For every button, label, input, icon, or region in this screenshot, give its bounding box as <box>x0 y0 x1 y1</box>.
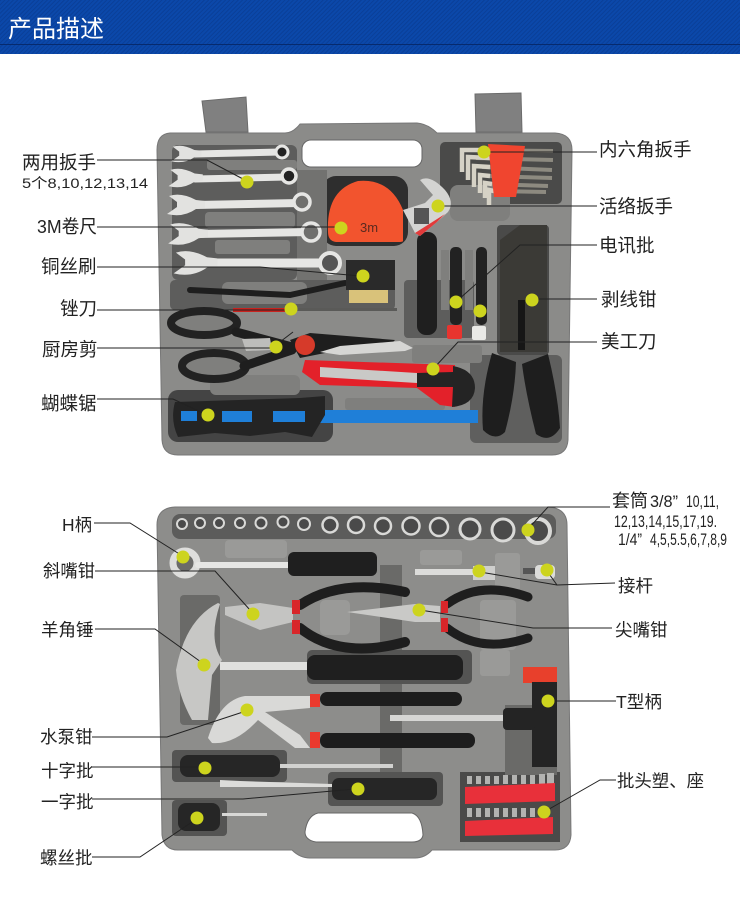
claw hammer <box>176 603 463 720</box>
water pump pliers <box>208 692 475 748</box>
leader: 内六角扳手 <box>485 151 597 153</box>
labels: lower case, left: 一字批 <box>41 792 94 812</box>
labels: upper case, left <box>22 152 148 414</box>
extension bars <box>415 565 555 580</box>
ratchet handle <box>173 551 377 576</box>
wire stripper pliers <box>482 225 560 438</box>
adjustable wrench <box>403 178 451 335</box>
leader: 锉刀 <box>97 309 288 311</box>
T-handle driver <box>390 667 557 767</box>
title: 产品描述 <box>8 16 104 43</box>
slotted screwdriver <box>220 778 437 800</box>
labels: upper case, right: 电讯批 <box>599 235 655 256</box>
case body <box>157 123 572 455</box>
leader: 斜嘴钳 <box>95 571 250 610</box>
labels: upper case, right: 活络扳手 <box>599 196 673 217</box>
long nose pliers <box>347 590 528 644</box>
leader: 一字批 <box>92 789 355 799</box>
tape measure <box>328 181 403 242</box>
panel: upper tool case <box>97 93 597 455</box>
socket sizes text block <box>612 491 727 549</box>
labels: upper case, left: 蝴蝶锯 <box>41 393 97 414</box>
tape measure: 3m <box>360 220 378 235</box>
callout dots and leaders, upper case <box>97 146 597 422</box>
leader: T型柄 <box>548 700 616 702</box>
leader: 厨房剪 <box>97 332 293 348</box>
labels: upper case, right: 美工刀 <box>601 331 657 352</box>
wire brush <box>190 260 395 303</box>
socket sizes text block: 10,11, <box>686 492 719 511</box>
leader: 羊角锤 <box>95 629 201 662</box>
leader: 螺丝批 <box>92 820 195 857</box>
leader: 3M卷尺 <box>97 226 335 228</box>
leader: 两用扳手 <box>97 160 243 179</box>
case latch tabs <box>202 93 522 132</box>
leader: 电讯批 <box>458 245 597 300</box>
kitchen scissors <box>171 311 413 379</box>
labels: upper case, left: 厨房剪 <box>42 339 98 360</box>
leader: 剥线钳 <box>532 298 597 300</box>
leader: 水泵钳 <box>92 712 243 737</box>
bit holder set <box>465 773 555 836</box>
labels: lower case, right: 批头塑、座 <box>617 771 704 791</box>
hex key set <box>462 144 553 205</box>
labels: lower case, left <box>40 515 95 868</box>
tray recesses <box>168 142 562 443</box>
handle cut-out <box>305 813 423 842</box>
case body <box>157 507 571 858</box>
leader: 十字批 <box>92 766 203 768</box>
callout dots and leaders, lower case <box>92 507 616 857</box>
leader: 接杆 <box>480 571 615 585</box>
yellow marker dots <box>202 146 538 422</box>
labels: lower case, left: 十字批 <box>41 761 94 781</box>
hacksaw <box>173 396 478 437</box>
file <box>233 308 397 312</box>
labels: upper case, left: 铜丝刷 <box>41 256 97 277</box>
labels: upper case, right <box>599 139 692 352</box>
telecom screwdrivers <box>447 247 487 340</box>
leader: 批头塑、座 <box>544 780 616 812</box>
socket sizes text block: 套筒 <box>612 491 648 511</box>
labels: lower case, left: 羊角锤 <box>41 620 94 640</box>
labels: lower case, right: T型柄 <box>616 692 662 712</box>
leader: 套筒 <box>528 507 610 529</box>
tray recesses <box>172 514 560 842</box>
leader: 尖嘴钳 <box>420 610 612 628</box>
socket sizes text block: 3/8” <box>650 492 678 511</box>
labels: lower case, right <box>612 491 727 791</box>
labels: lower case, right: 尖嘴钳 <box>615 620 668 640</box>
combination wrenches <box>167 146 340 275</box>
labels: upper case, left: 两用扳手 <box>22 152 96 173</box>
socket row <box>177 516 550 543</box>
diagonal cutting pliers <box>225 587 405 648</box>
labels: upper case, left: 锉刀 <box>60 298 97 319</box>
utility knife <box>302 360 475 407</box>
yellow marker dots <box>176 524 554 824</box>
labels: lower case, left: H柄 <box>62 515 92 535</box>
labels: lower case, left: 水泵钳 <box>40 727 92 747</box>
header banner <box>0 0 740 54</box>
labels: lower case, left: 斜嘴钳 <box>43 561 95 581</box>
raised tray plates <box>225 540 520 676</box>
socket sizes text block: 1/4” <box>618 530 642 549</box>
labels: upper case, right: 内六角扳手 <box>599 139 692 160</box>
labels: lower case, left: 螺丝批 <box>40 848 92 868</box>
panel: lower tool case <box>92 507 616 858</box>
raised tray plates <box>205 160 510 410</box>
leader: 美工刀 <box>434 342 597 368</box>
leader: 活络扳手 <box>438 205 597 207</box>
leader: 蝴蝶锯 <box>97 399 205 414</box>
leader: H柄 <box>94 523 181 555</box>
labels: upper case, right: 剥线钳 <box>601 289 657 310</box>
handle cut-out <box>302 140 422 167</box>
labels: upper case, left: 3M卷尺 <box>37 216 97 237</box>
labels: upper case, left: 5个8,10,12,13,14 <box>22 175 148 191</box>
labels: lower case, right: 接杆 <box>618 576 653 596</box>
leader: 铜丝刷 <box>97 267 360 276</box>
stubby screwdriver <box>178 803 267 831</box>
phillips screwdriver <box>180 755 393 777</box>
